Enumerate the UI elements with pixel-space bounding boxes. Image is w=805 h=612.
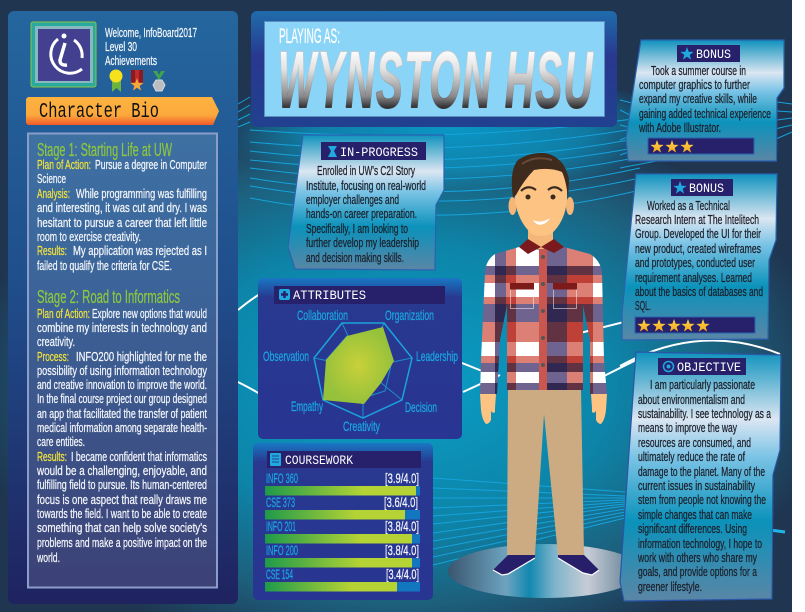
attributes header: [274, 286, 445, 304]
objective text: [637, 377, 772, 594]
stage 2 body: world.: [36, 550, 60, 565]
stage 1 heading: Stage 1: Starting Life at UW: [37, 139, 172, 160]
banner: Character Bio: [26, 97, 219, 125]
stage 2 body: care entities.: [37, 434, 85, 449]
right margin: [792, 0, 805, 612]
panel: character sidebar: [8, 11, 238, 604]
hands: [480, 394, 607, 424]
stage 2 body: I became confident that informatics: [71, 449, 207, 464]
bonus text: Worked as a Technical: [647, 198, 730, 213]
hair: [512, 153, 569, 198]
panel: objective: [620, 352, 781, 601]
stage 2 body: Process:: [37, 349, 69, 364]
stage 1 body: room to exercise creativity.: [37, 229, 141, 244]
icon: red star medal: [130, 70, 144, 91]
course: INFO 200: INFO 200: [266, 542, 298, 558]
in-progress text: employer challenges and: [306, 192, 399, 207]
icon: silver medal: [153, 71, 165, 91]
stage 1 body: [37, 157, 207, 273]
objective text: significant differences. Using: [638, 521, 747, 536]
in-progress text: Enrolled in UW's C2I Story: [317, 163, 415, 178]
course: CSE 373: CSE 373: [266, 494, 295, 510]
stage 2 body: an app that facilitated the transfer of patient: [37, 406, 207, 421]
course: CSE 154: [3.4/4.0]: [386, 566, 419, 582]
welcome text: Welcome, InfoBoard2017: [105, 25, 197, 40]
stage 2 body: In the final course project our group designed: [37, 391, 207, 406]
course: INFO 360: [265, 470, 420, 496]
attributes header: ATTRIBUTES: [293, 288, 366, 303]
stage 1 body: and interesting, it was cut and dry. I was: [37, 200, 207, 215]
stage 2 body: medical information among separate health-: [37, 420, 207, 435]
course: INFO 360: [3.9/4.0]: [385, 470, 419, 486]
course: CSE 154: CSE 154: [266, 566, 293, 582]
radar labels: Creativity: [343, 418, 380, 434]
radar labels: Organization: [385, 307, 434, 323]
radar labels: Observation: [263, 348, 309, 364]
stage 2 body: Results:: [37, 449, 67, 464]
shoes: [493, 555, 599, 575]
stage 2 body: something that can help solve society's: [37, 520, 207, 535]
stage 2 body: and creative innovation to improve the world.: [37, 377, 207, 392]
objective text: resources are consumed, and: [638, 435, 751, 450]
course: CSE 373: [3.6/4.0]: [384, 494, 418, 510]
stage 1 body: My application was rejected as I: [73, 243, 207, 258]
character illustration: [478, 153, 610, 575]
stage 2 body: possibility of using information technology: [37, 363, 207, 378]
radar labels: Empathy: [291, 398, 323, 414]
stage 2 heading: Stage 2: Road to Informatics: [37, 286, 180, 307]
coursework header: COURSEWORK: [285, 453, 353, 468]
course: INFO 200: [265, 542, 420, 568]
radar chart: [314, 323, 412, 418]
welcome text: Level 30: [105, 39, 137, 54]
bonus text: [638, 63, 771, 135]
course: INFO 200: [3.8/4.0]: [385, 542, 419, 558]
radar labels: Leadership: [416, 348, 458, 364]
in-progress tag: [321, 142, 426, 160]
objective text: I am particularly passionate: [650, 377, 755, 392]
stage 1 body: Science: [37, 171, 66, 186]
placket: [539, 249, 547, 390]
course: CSE 154: [265, 566, 420, 592]
stage 2 body: creativity.: [37, 334, 75, 349]
course: INFO 201: [265, 518, 420, 544]
radar labels: Decision: [405, 399, 437, 415]
stage 2 body: Plan of Action:: [37, 306, 90, 321]
stage 2 body: problems and make a positive impact on the: [37, 535, 207, 550]
facial features: [521, 187, 562, 225]
in-progress text: and decision making skills.: [306, 250, 404, 265]
in-progress text: hands-on career preparation.: [306, 206, 417, 221]
stage 1 body: While programming was fulfilling: [76, 186, 207, 201]
stage 2 body: [36, 306, 207, 565]
bio text box: [28, 134, 217, 588]
bonus text: [635, 198, 763, 313]
objective tag: [658, 358, 746, 375]
radar labels: Collaboration: [297, 307, 348, 323]
bonus tag: [671, 179, 733, 196]
stage 2 body: focus is one aspect that really draws me: [37, 492, 207, 507]
objective text: greener lifestyle.: [638, 579, 702, 594]
stage 1 body: hesitant to pursue a career that left little: [37, 215, 207, 230]
panel: title: PLAYING AS:: [279, 25, 340, 48]
icon: gold medal: [110, 70, 122, 92]
coursework header: [267, 451, 421, 468]
rating: 3 stars: [648, 138, 754, 154]
in-progress tag: IN-PROGRESS: [340, 145, 418, 160]
stage 2 body: Explore new options that would: [92, 306, 207, 321]
course: INFO 201: INFO 201: [266, 518, 296, 534]
plaid shirt: [478, 245, 610, 395]
panel: coursework: [253, 443, 433, 600]
panel: title: [251, 11, 617, 127]
objective text: about environmentalism and: [638, 392, 745, 407]
bonus tag: BONUS: [689, 181, 724, 196]
pockets: [510, 283, 577, 308]
bonus text: Took a summer course in: [651, 63, 746, 78]
stage 1 body: failed to qualify the criteria for CSE.: [37, 258, 172, 273]
collar: [519, 239, 564, 254]
panel: bonus 1: [626, 40, 784, 161]
neck: [528, 225, 553, 250]
banner: Character Bio: Character Bio: [39, 101, 159, 124]
course: INFO 360: INFO 360: [266, 470, 298, 486]
welcome text: Achievements: [105, 53, 157, 68]
stage 2 body: INFO200 highlighted for me the: [76, 349, 207, 364]
objective text: ultimately reduce the rate of: [638, 449, 745, 464]
rating: 5 stars: [635, 317, 755, 333]
bonus tag: BONUS: [696, 47, 731, 62]
bonus text: computer graphics to further: [639, 77, 750, 92]
welcome text: [105, 25, 197, 68]
panel: in-progress: [288, 135, 444, 270]
face: [515, 158, 567, 236]
stage 2 body: would be a challenging, enjoyable, and: [36, 463, 207, 478]
course: INFO 201: [3.8/4.0]: [385, 518, 419, 534]
stage 2 body: fulfilling field to pursue. Its human-centered: [37, 477, 207, 492]
spotlight: [448, 544, 642, 598]
stage 1 body: Pursue a degree in Computer: [95, 157, 207, 172]
avatar: [31, 22, 96, 87]
in-progress text: [306, 163, 426, 265]
stage 1 body: Analysis:: [37, 186, 70, 201]
objective text: means to improve the way: [638, 420, 737, 435]
in-progress text: Specifically, I am looking to: [306, 221, 408, 236]
ears: [508, 197, 574, 215]
panel: bonus 2: [622, 174, 777, 340]
in-progress text: further develop my leadership: [306, 235, 419, 250]
bonus text: with Adobe Illustrator.: [638, 120, 721, 135]
trousers: [507, 390, 584, 555]
panel: attributes: [258, 278, 462, 439]
bonus tag: [677, 45, 740, 62]
stage 1 body: Results:: [37, 243, 67, 258]
bonus text: SQL.: [635, 298, 651, 313]
objective tag: OBJECTIVE: [677, 360, 741, 375]
course: CSE 373: [265, 494, 420, 520]
radar labels: [263, 307, 458, 434]
buttons: [541, 255, 545, 367]
stage 1 body: Plan of Action:: [37, 157, 91, 172]
stage 2 body: combine my interests in technology and: [37, 320, 207, 335]
in-progress text: Institute, focusing on real-world: [306, 178, 426, 193]
stage 2 body: towards the field. I want to be able to create: [37, 506, 207, 521]
